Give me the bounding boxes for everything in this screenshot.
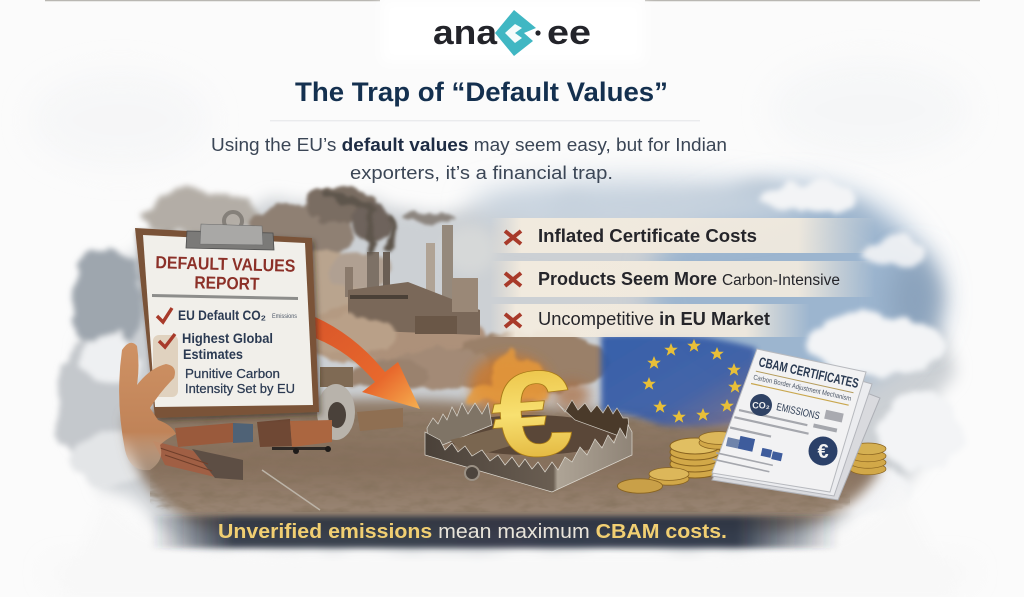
row: uncompetitive: Uncompetitive in EU Market	[538, 309, 770, 329]
flames	[468, 347, 590, 415]
bear trap	[425, 343, 632, 492]
row: carbon intensive	[490, 261, 875, 297]
row: carbon intensive: Products Seem More Carbon-Intensive	[538, 269, 840, 289]
chimney smoke	[325, 195, 393, 252]
issues list	[490, 218, 875, 337]
logo: ee	[547, 14, 591, 52]
CO2 badge: CO₂	[752, 400, 770, 410]
boxes behind arrow	[320, 367, 353, 387]
steel coil	[317, 384, 355, 440]
item: punitive carbon	[185, 367, 295, 396]
faint page mottling	[30, 60, 970, 580]
metal clip	[186, 212, 274, 250]
container stack upper left	[175, 423, 233, 447]
row: inflated costs	[490, 218, 875, 253]
euro badge: €	[817, 441, 829, 463]
trap back wall right	[557, 400, 630, 440]
hand	[119, 343, 176, 470]
trap spring	[465, 466, 479, 480]
paper	[143, 235, 313, 407]
item: punitive carbon: Punitive Carbon	[185, 367, 280, 381]
trap floor	[444, 415, 616, 455]
trap front wall	[425, 425, 632, 492]
item: highest global: Highest Global	[182, 331, 273, 346]
EU flag	[601, 334, 756, 427]
timber boxes	[357, 408, 403, 431]
logo	[382, 0, 644, 62]
bottom banner	[150, 516, 840, 548]
euro badge	[808, 436, 838, 466]
containers and coil	[153, 367, 403, 510]
container stack upper right	[257, 419, 292, 447]
document text: CBAM CERTIFICATES	[757, 354, 860, 391]
sky top	[470, 179, 810, 231]
item: emissions small: Emissions	[272, 314, 297, 320]
far right blue	[889, 254, 941, 346]
row: uncompetitive	[490, 304, 810, 337]
check: EU default	[157, 308, 172, 322]
sky and cloud base	[74, 195, 944, 545]
subtitle text: Using the EU’s default values may seem easy, but for Indian	[211, 134, 727, 155]
smoke clouds	[248, 187, 610, 394]
right white clouds	[757, 183, 962, 515]
subtitle text	[211, 134, 727, 183]
factory	[345, 225, 480, 335]
check: highest global	[159, 334, 175, 347]
report heading: REPORT	[194, 272, 260, 294]
document text	[713, 349, 860, 487]
report divider	[152, 294, 298, 300]
document text: Carbon Border Adjustment Mechanism	[753, 374, 852, 403]
item: punitive carbon: Intensity Set by EU	[185, 382, 295, 396]
container stack lower	[153, 441, 215, 477]
logo: ana	[433, 14, 498, 52]
document text: EMISSIONS	[775, 401, 821, 422]
arrow	[315, 317, 420, 409]
report heading	[155, 252, 296, 295]
main page	[712, 349, 866, 492]
title: The Trap of “Default Values”	[295, 77, 668, 107]
clipboard	[119, 212, 319, 470]
report heading: DEFAULT VALUES	[155, 252, 296, 276]
gold coins	[618, 432, 886, 493]
sky behind factory	[444, 226, 496, 274]
ground	[125, 399, 880, 530]
item: highest global	[182, 331, 273, 362]
CO2 badge	[750, 394, 772, 416]
trap back wall	[427, 403, 492, 446]
illustration backdrop	[57, 179, 962, 545]
thumb shadow patch	[153, 335, 178, 397]
row: inflated costs: Inflated Certificate Costs	[538, 225, 757, 246]
trap plate	[450, 425, 530, 458]
euro symbol: €	[487, 343, 577, 485]
blue sky right	[650, 185, 930, 395]
top border lines	[45, 0, 980, 2]
ground texture	[150, 412, 850, 512]
white fade at bottom edge	[60, 480, 960, 597]
item: highest global: Estimates	[183, 347, 243, 362]
left grey clouds	[57, 193, 260, 488]
bottom banner: Unverified emissions mean maximum CBAM costs.	[218, 521, 727, 543]
subtitle text: exporters, it’s a financial trap.	[350, 162, 613, 183]
CBAM certificates document	[712, 349, 880, 500]
brown smoke in front of factory	[310, 317, 490, 391]
road line	[262, 470, 320, 510]
title underline	[270, 120, 700, 121]
item: EU default CO2: EU Default CO₂	[178, 307, 266, 323]
